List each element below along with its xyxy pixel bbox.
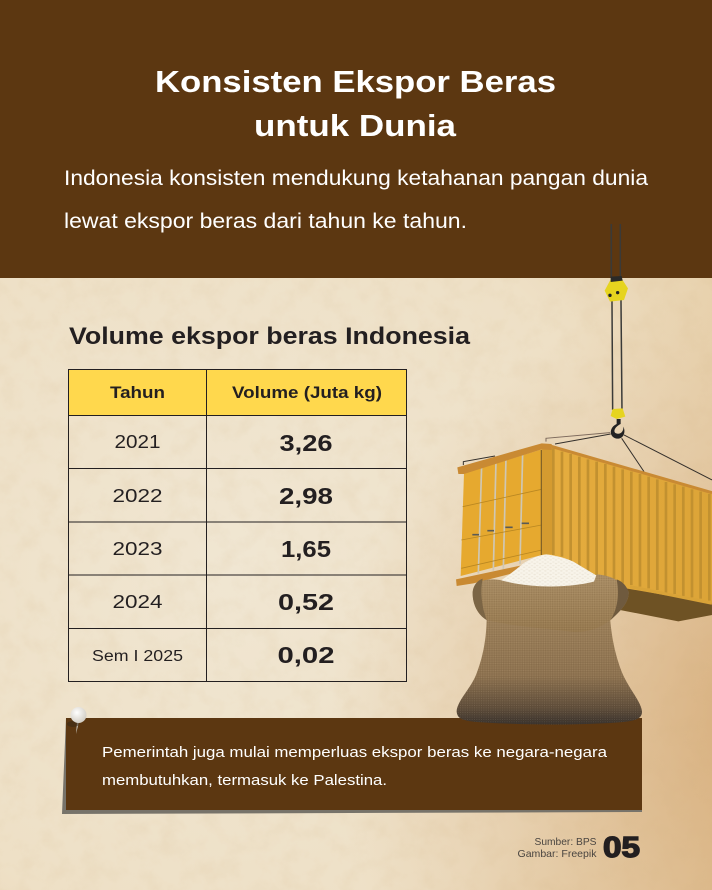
intro text: lewat ekspor beras dari tahun ke tahun. (64, 210, 467, 233)
title: Konsisten Ekspor Beras (155, 64, 556, 99)
year column (92, 431, 183, 665)
table header labels (110, 384, 382, 402)
table heading: Volume ekspor beras Indonesia (69, 323, 470, 350)
data table (68, 370, 406, 682)
source credits: Gambar: Freepik (518, 848, 597, 860)
volume column (278, 430, 334, 668)
callout text: membutuhkan, termasuk ke Palestina. (102, 772, 387, 789)
callout text (102, 744, 608, 789)
table header labels: Volume (Juta kg) (232, 384, 382, 402)
intro text (64, 167, 648, 233)
title (155, 64, 556, 143)
title: untuk Dunia (254, 108, 457, 143)
volume column: 1,65 (281, 536, 331, 562)
container underside (620, 587, 712, 621)
header band (0, 0, 712, 278)
sack body (457, 574, 642, 724)
crane hook and cables (463, 224, 712, 480)
source credits: Sumber: BPS (534, 836, 596, 848)
container side wall (540, 446, 712, 603)
push pin (67, 707, 86, 734)
year column: 2024 (112, 591, 162, 612)
volume column: 0,52 (278, 589, 334, 615)
year column: Sem I 2025 (92, 648, 183, 665)
source credits (518, 836, 597, 860)
callout box (62, 718, 642, 814)
shipping container (456, 443, 712, 621)
year column: 2023 (112, 538, 162, 559)
rice sack (457, 554, 642, 724)
page number: 05 (603, 832, 640, 864)
volume column: 0,02 (278, 642, 334, 668)
rice (499, 554, 604, 588)
callout text: Pemerintah juga mulai memperluas ekspor beras ke negara-negara (102, 744, 608, 761)
volume column: 3,26 (280, 430, 332, 456)
table header labels: Tahun (110, 384, 165, 402)
corrugation (553, 448, 709, 601)
volume column: 2,98 (279, 483, 333, 509)
year column: 2022 (112, 485, 162, 506)
container front doors (461, 449, 542, 576)
intro text: Indonesia konsisten mendukung ketahanan pangan dunia (64, 167, 648, 190)
year column: 2021 (114, 431, 160, 452)
